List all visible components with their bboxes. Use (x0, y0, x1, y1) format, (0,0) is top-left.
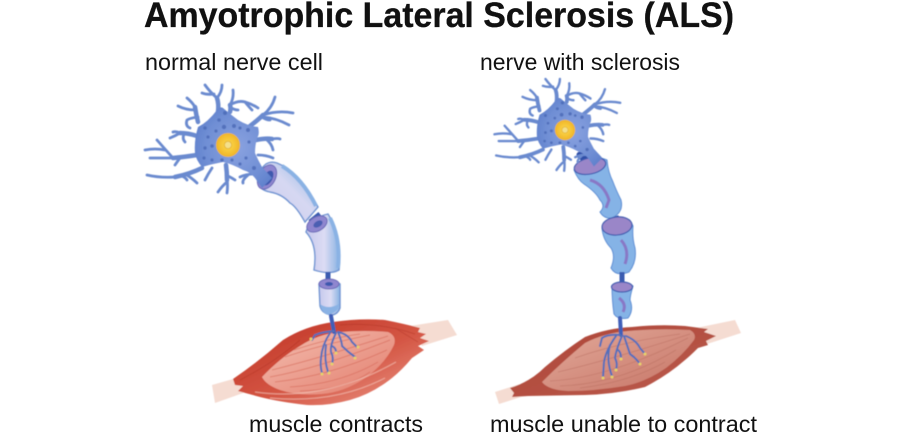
healthy axon (253, 162, 340, 315)
panel: nerve with sclerosis and weak muscle (494, 79, 741, 404)
sclerotic nerve terminals (600, 318, 646, 380)
sclerotic axon (573, 155, 635, 318)
label: normal nerve cell: normal nerve cell (145, 49, 323, 75)
label: nerve with sclerosis: nerve with sclerosis (480, 49, 680, 75)
weakened muscle (495, 320, 741, 404)
healthy neuron cell body (145, 85, 293, 193)
healthy muscle (212, 319, 457, 405)
panel: normal nerve and muscle (145, 85, 457, 405)
healthy nerve terminals (310, 316, 360, 376)
sclerotic neuron cell body (494, 79, 620, 171)
